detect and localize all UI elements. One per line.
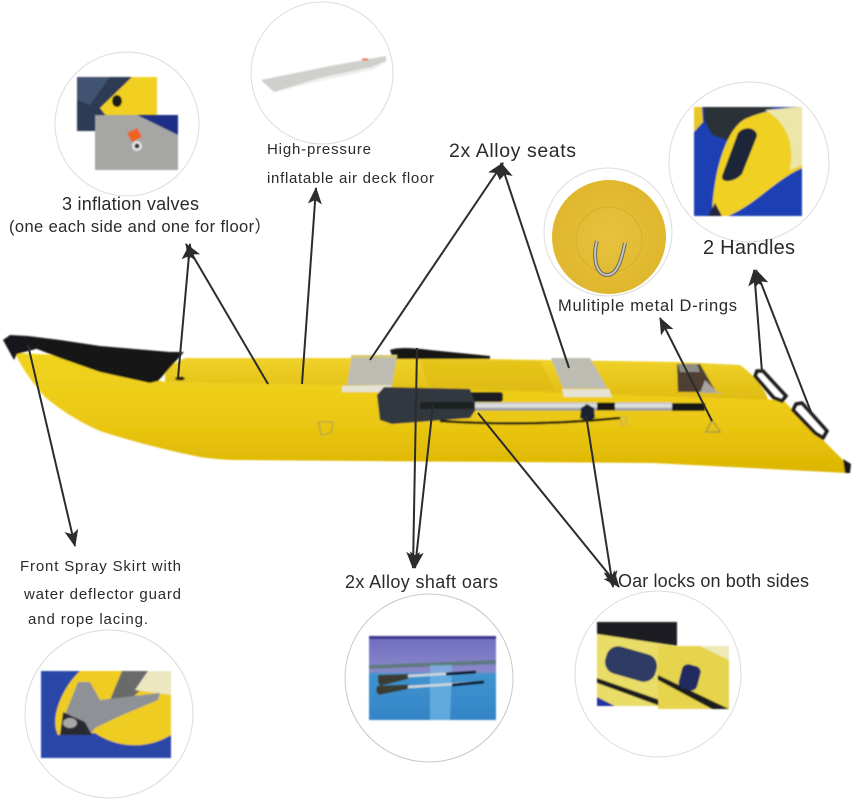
arrow: inflation valve 2 bbox=[186, 244, 268, 384]
oar 1 bbox=[378, 674, 408, 686]
photo: handle bbox=[694, 107, 802, 216]
label: front spray skirt: and rope lacing. bbox=[28, 611, 148, 628]
label: front spray skirt: Front Spray Skirt with bbox=[20, 558, 181, 575]
oar bag bbox=[460, 392, 503, 402]
arrow: handle 2 bbox=[756, 270, 811, 412]
cockpit shading bbox=[420, 360, 555, 390]
arrow: D-ring bbox=[660, 318, 712, 421]
label: alloy seats: 2x Alloy seats bbox=[449, 140, 576, 162]
arrow: right seat bbox=[501, 163, 569, 368]
label: air deck floor: High-pressure bbox=[267, 141, 371, 158]
black strap behind seats bbox=[390, 348, 490, 359]
arrow: spray skirt bbox=[28, 345, 75, 546]
panel: oar locks detail bbox=[575, 591, 741, 757]
photo: oars on blue mat bbox=[369, 636, 496, 720]
oar blade bbox=[377, 387, 477, 424]
D-rings bbox=[319, 422, 333, 435]
label: inflation valves bbox=[9, 194, 271, 236]
photo: bow of boat bbox=[41, 671, 171, 758]
bow tip bbox=[3, 335, 36, 360]
label: front spray skirt bbox=[20, 558, 181, 628]
label: oar locks: Oar locks on both sides bbox=[618, 571, 809, 591]
right seat bbox=[551, 358, 607, 388]
rear compartment bbox=[677, 364, 716, 392]
arrow: inflation valve 1 bbox=[178, 244, 190, 378]
oar 2 bbox=[376, 684, 408, 695]
far tube bbox=[165, 358, 768, 400]
panel: alloy shaft oars detail bbox=[345, 594, 513, 762]
photo: oar lock left bbox=[597, 622, 677, 706]
stern tip bbox=[843, 459, 851, 473]
oar lock bbox=[580, 404, 595, 421]
spray skirt bbox=[28, 336, 184, 383]
photo: floor valve bbox=[95, 115, 178, 170]
oar shaft bbox=[475, 402, 672, 410]
label: alloy shaft oars: 2x Alloy shaft oars bbox=[345, 572, 498, 592]
panel: D-ring detail bbox=[544, 168, 672, 296]
photo: yellow patch bbox=[552, 180, 666, 294]
arrow: left seat bbox=[370, 163, 503, 360]
near tube hull bbox=[15, 353, 847, 473]
panel: handles detail bbox=[669, 82, 829, 242]
label: front spray skirt: water deflector guard bbox=[23, 586, 181, 603]
arrow: handle 1 bbox=[754, 270, 762, 372]
label: air deck floor bbox=[267, 141, 434, 187]
arrow: oar lock 2 bbox=[586, 415, 613, 587]
panel: inflation valves detail bbox=[55, 52, 199, 196]
photo: side valve bbox=[77, 77, 157, 131]
left seat bbox=[347, 355, 397, 385]
arrow: oar 1 bbox=[413, 348, 417, 568]
photo: oar lock right bbox=[658, 646, 729, 709]
valve bbox=[175, 376, 185, 380]
panel: front spray skirt detail bbox=[25, 630, 193, 798]
photo: air deck floor bbox=[261, 56, 386, 92]
label: handles: 2 Handles bbox=[703, 237, 795, 259]
illustration: yellow catamaran kayak bbox=[3, 335, 851, 473]
label: D-rings: Mulitiple metal D-rings bbox=[558, 297, 737, 315]
rope bbox=[440, 418, 620, 423]
arrow: oar 2 bbox=[415, 405, 433, 568]
panel: air deck floor detail bbox=[251, 2, 393, 144]
arrow: air deck floor bbox=[302, 188, 316, 384]
label: air deck floor: inflatable air deck floor bbox=[267, 170, 434, 187]
arrow: oar lock 1 bbox=[478, 413, 619, 587]
icon: D-ring bbox=[595, 241, 625, 275]
label: inflation valves: 3 inflation valves bbox=[62, 194, 199, 214]
rear handles bbox=[755, 371, 786, 401]
label: inflation valves: (one each side and one for floor） bbox=[9, 217, 271, 236]
